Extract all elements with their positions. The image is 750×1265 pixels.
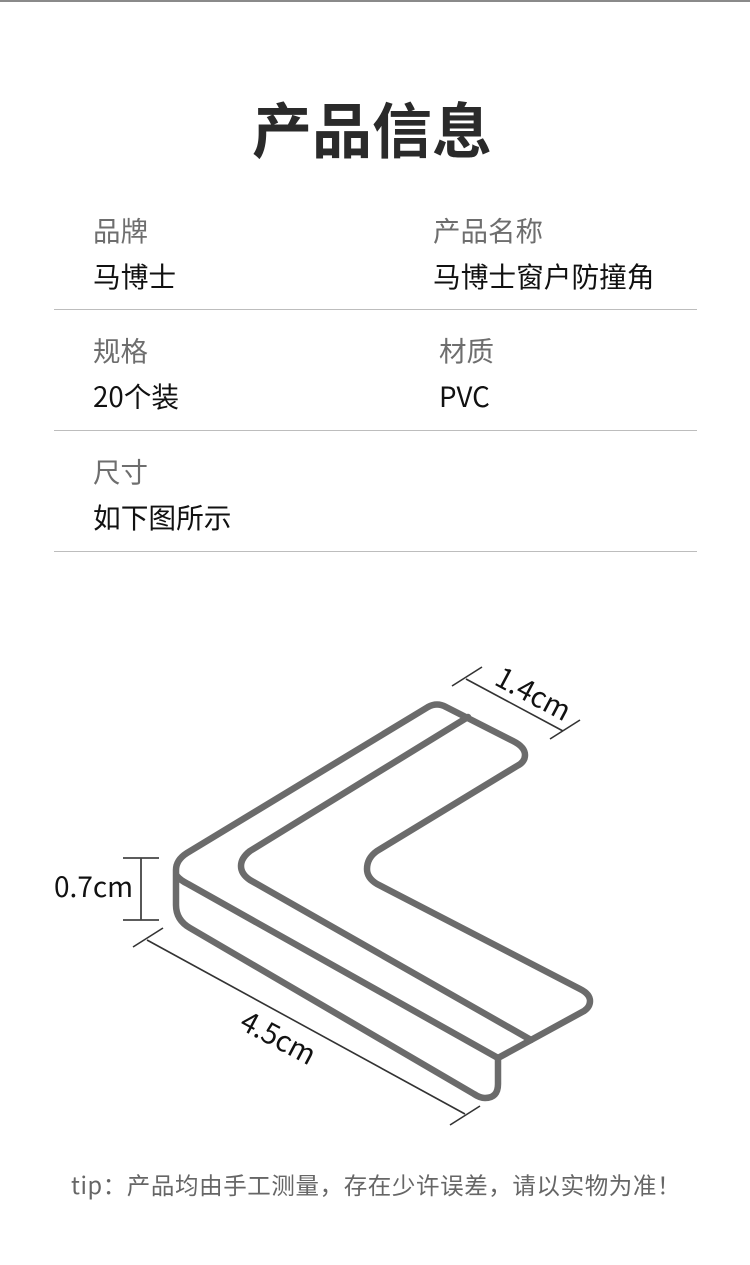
label 0.7cm: 0.7cm <box>54 866 133 906</box>
front edge <box>177 876 498 1058</box>
diagram: L-shaped corner guard <box>176 704 590 1098</box>
brand value: 马博士 <box>93 255 176 295</box>
outer outline <box>176 704 590 1098</box>
size label: 尺寸 <box>93 450 148 490</box>
size value: 如下图所示 <box>93 496 231 536</box>
dimension: 0.7cm <box>54 858 159 920</box>
product name label: 产品名称 <box>433 209 543 249</box>
material label: 材质 <box>439 329 494 369</box>
product name value: 马博士窗户防撞角 <box>433 255 655 295</box>
tip note: tip：产品均由手工测量，存在少许误差，请以实物为准！ <box>71 1167 681 1201</box>
spec: size <box>93 450 231 536</box>
label 4.5cm: 4.5cm <box>234 1000 324 1074</box>
inner groove <box>241 717 531 1040</box>
material value: PVC <box>439 375 490 415</box>
spec: product name <box>433 209 655 295</box>
title: 产品信息 <box>252 84 492 171</box>
spec: material <box>439 329 494 415</box>
dimension: 4.5cm <box>133 928 480 1125</box>
dimension: 1.4cm <box>452 656 580 739</box>
brand label: 品牌 <box>93 209 148 249</box>
label 1.4cm: 1.4cm <box>489 656 579 730</box>
spec: brand <box>93 209 176 295</box>
package value: 20个装 <box>93 375 179 415</box>
package label: 规格 <box>93 329 148 369</box>
spec: package <box>93 329 179 415</box>
